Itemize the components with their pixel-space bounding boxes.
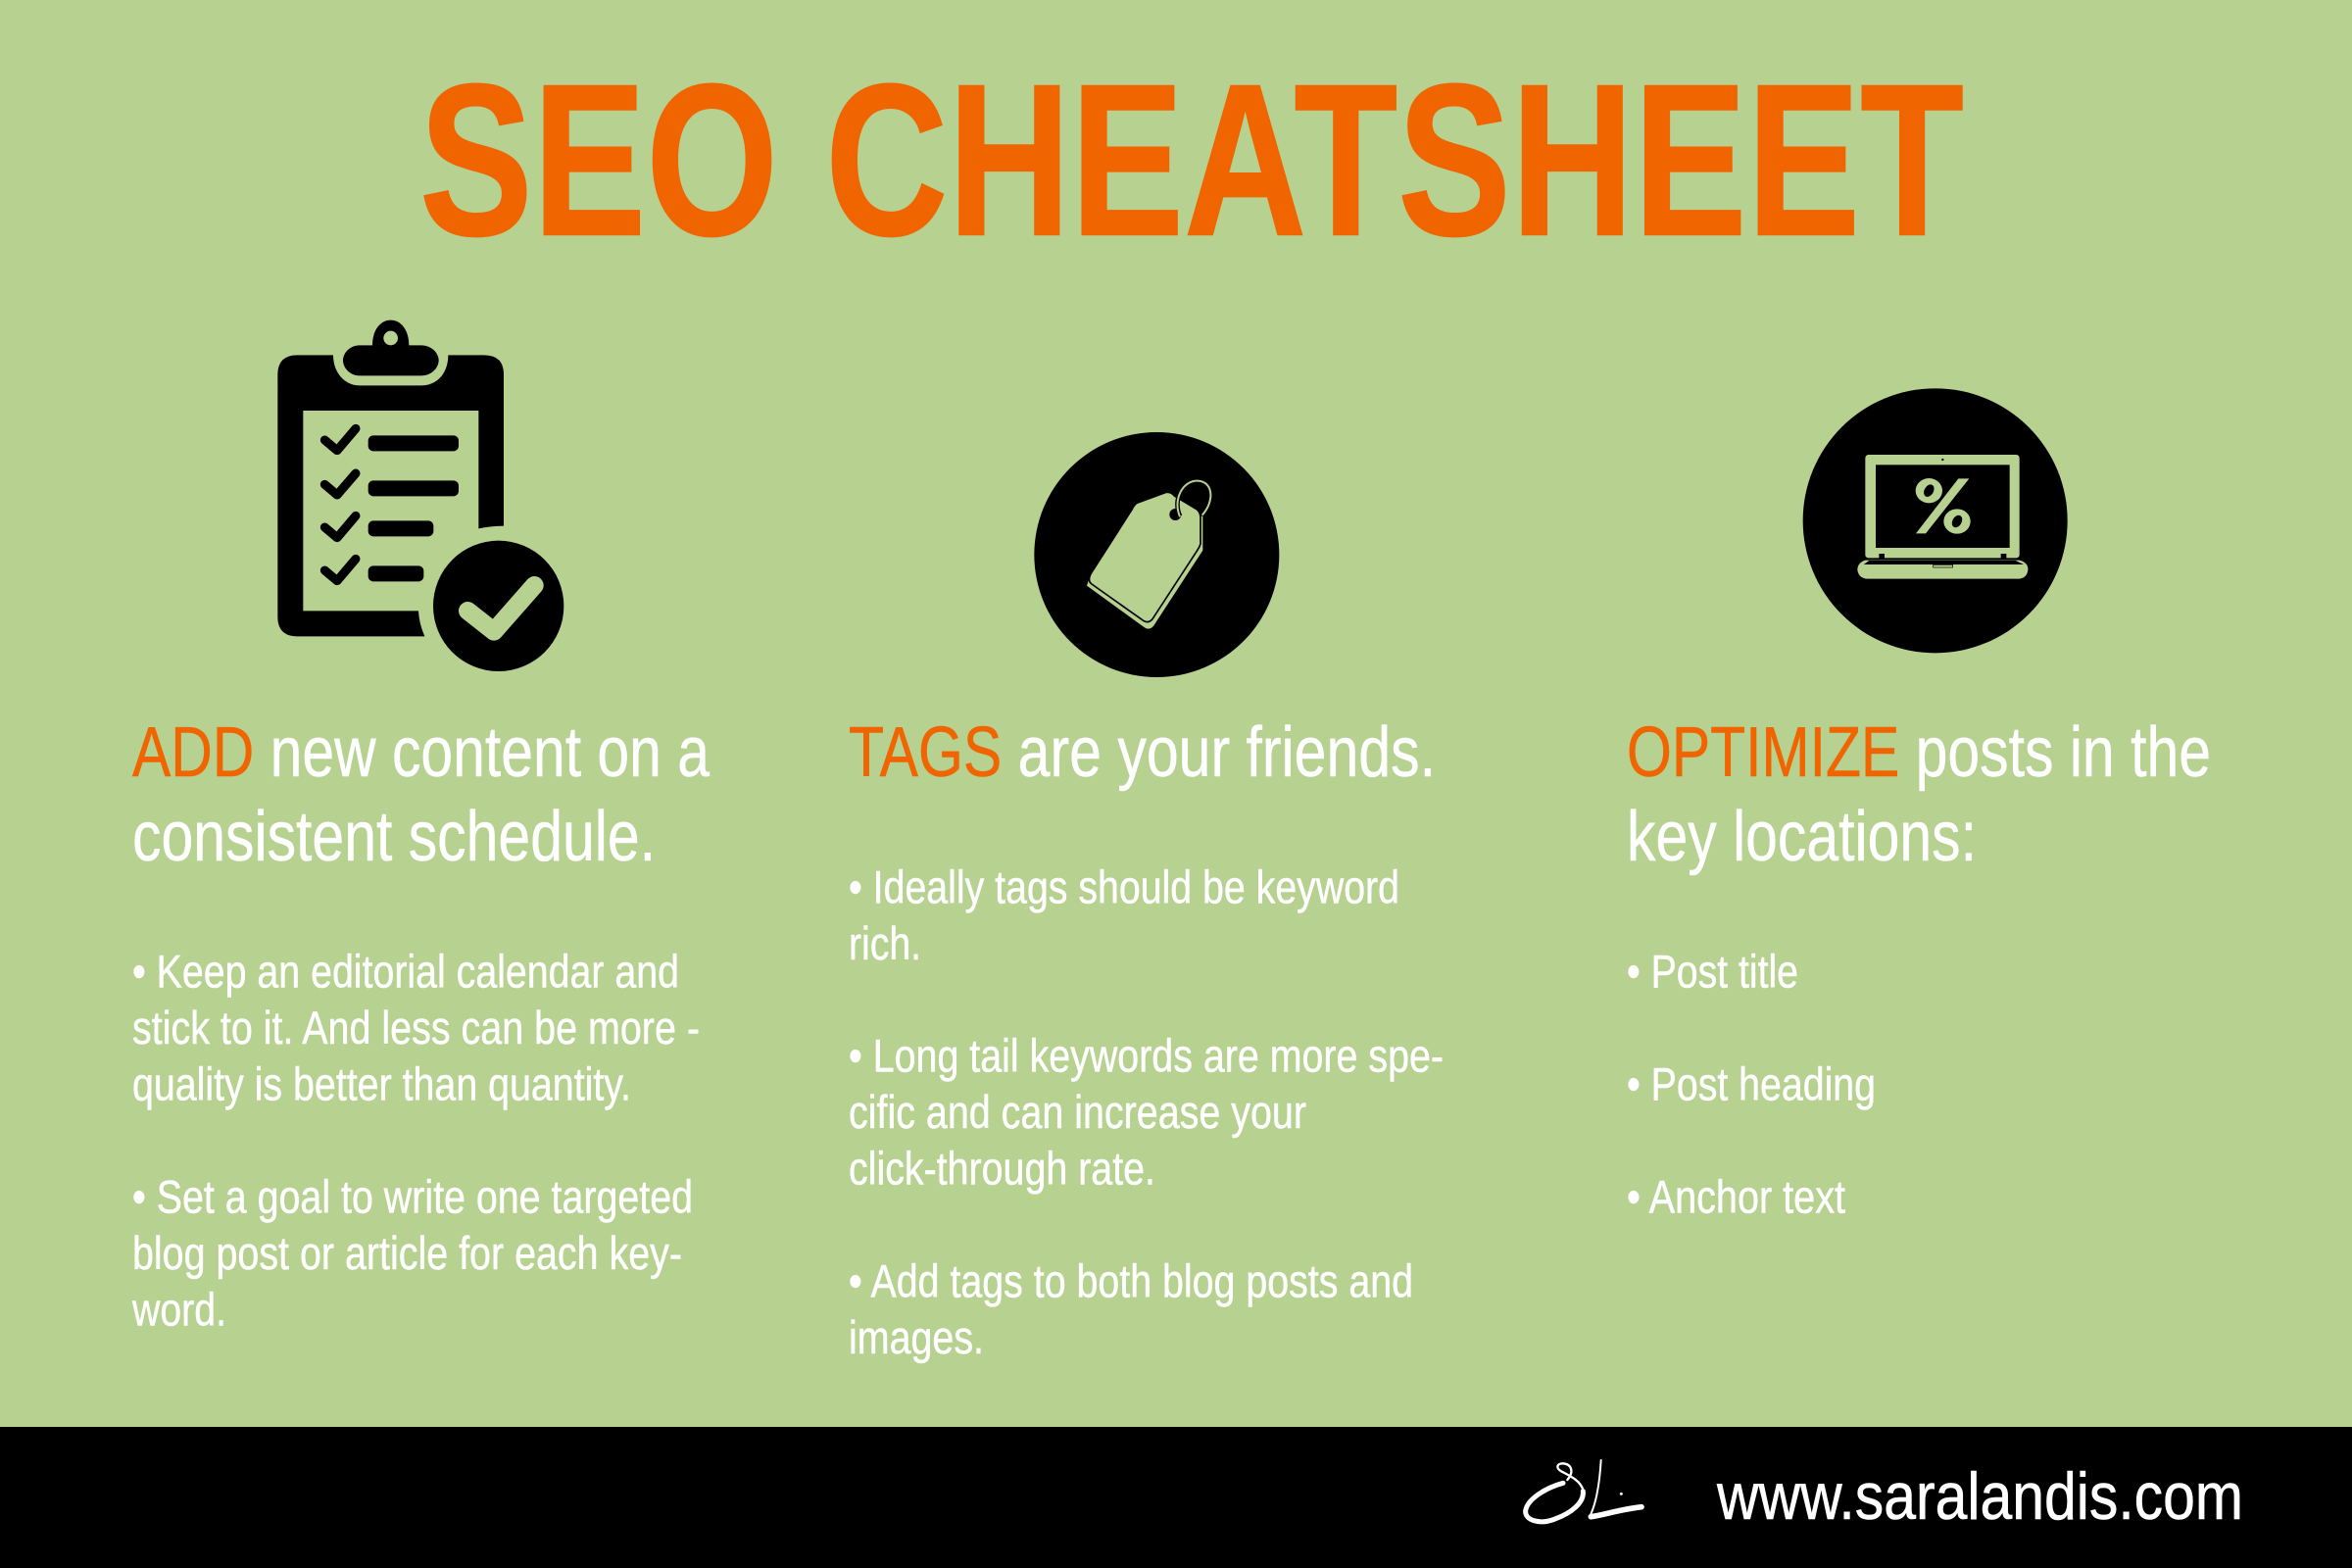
heading: tags: TAGS are your friends. [849, 713, 1436, 792]
text block: add bullets: blog post or article for each key- [132, 1227, 682, 1279]
website url: www.saralandis.com [1716, 1459, 2243, 1534]
text block: add bullets: stick to it. And less can be more - [132, 1002, 700, 1054]
text block: add bullets: • Keep an editorial calendar and [132, 945, 679, 998]
heading: optimize: key locations: [1627, 798, 1977, 876]
text block: optimize bullets: • Post title [1627, 945, 1798, 998]
text block: optimize bullets: • Post heading [1627, 1058, 1876, 1109]
text block: tags bullets: click-through rate. [849, 1143, 1155, 1194]
text block: tags bullets: rich. [849, 917, 921, 969]
text block: add bullets [131, 945, 700, 1335]
heading: add: ADD new content on a [132, 713, 710, 792]
text block: optimize bullets [1627, 945, 1876, 1223]
text block: tags bullets [849, 860, 1444, 1363]
heading: optimize: OPTIMIZE posts in the [1627, 713, 2211, 792]
heading: optimize [1627, 713, 2211, 876]
icon: laptop percent [1803, 388, 2068, 653]
text block: add bullets: • Set a goal to write one targeted [132, 1170, 693, 1223]
icon: price tag [1034, 432, 1279, 677]
title: SEO CHEATSHEET [419, 39, 1964, 280]
icon: clipboard checklist [277, 320, 564, 671]
text block: optimize bullets: • Anchor text [1627, 1170, 1845, 1223]
text block: tags bullets: • Long tail keywords are more spe- [849, 1029, 1444, 1082]
footer bar [0, 1427, 2352, 1568]
text block: add bullets: word. [131, 1284, 226, 1335]
text block: tags bullets: images. [849, 1311, 984, 1363]
panel: tags [849, 432, 1444, 1363]
panel: add content [131, 320, 710, 1335]
icon: signature [1526, 1460, 1642, 1522]
text block: tags bullets: • Ideally tags should be keyword [849, 860, 1399, 913]
text block: tags bullets: • Add tags to both blog posts and [849, 1254, 1413, 1307]
heading: add [132, 713, 710, 876]
text block: tags bullets: cific and can increase your [849, 1086, 1306, 1138]
panel: optimize [1627, 388, 2211, 1223]
text block: add bullets: quality is better than quantity. [132, 1058, 631, 1109]
heading: add: consistent schedule. [132, 798, 656, 876]
